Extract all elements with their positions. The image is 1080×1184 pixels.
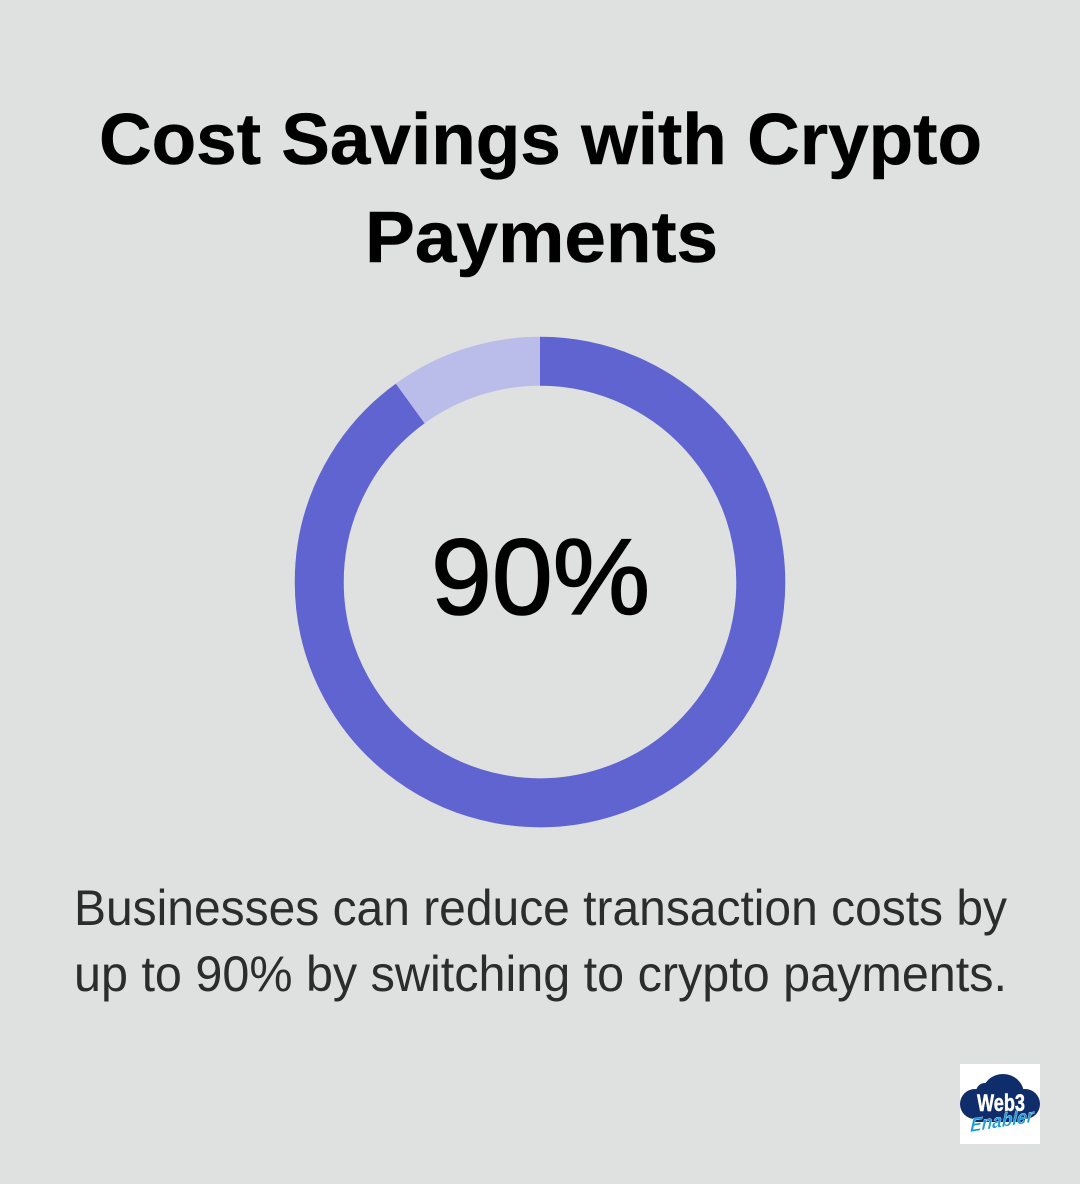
description: up to 90% by switching to crypto payments. bbox=[74, 946, 1007, 1002]
title: Cost Savings with Crypto bbox=[99, 100, 982, 180]
title bbox=[99, 100, 982, 278]
logo wordmark: Web3 bbox=[977, 1090, 1025, 1117]
full ring segment: 90% bbox=[319, 361, 761, 803]
description bbox=[74, 880, 1007, 1002]
center value: 90% bbox=[431, 516, 650, 637]
description: Businesses can reduce transaction costs by bbox=[74, 880, 1007, 936]
icon: cloud bbox=[960, 1074, 1040, 1122]
title: Payments bbox=[365, 198, 718, 278]
logo script: Enabler bbox=[970, 1106, 1035, 1137]
remaining ring segment: 10% bbox=[410, 361, 540, 403]
logo: Web3 Enabler bbox=[960, 1064, 1040, 1144]
donut chart: 90% bbox=[319, 361, 761, 803]
